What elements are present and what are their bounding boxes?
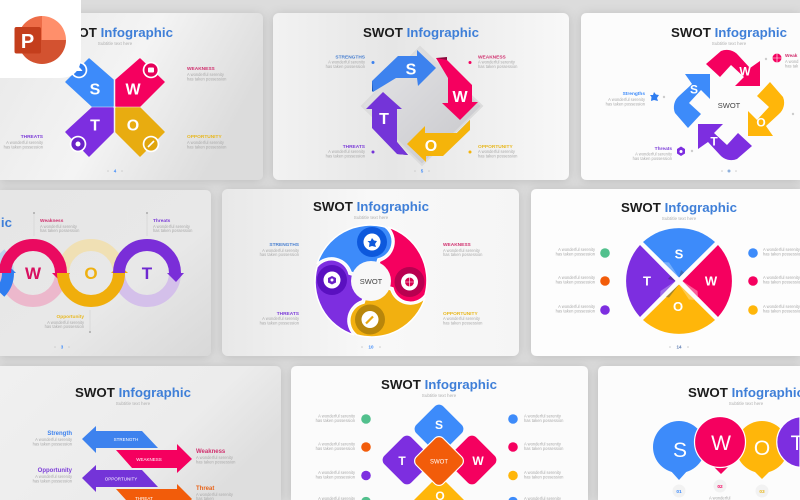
- diamond S: S: [435, 418, 443, 432]
- page number: [54, 344, 70, 350]
- label: threat: [196, 486, 234, 500]
- petal S: S: [90, 82, 101, 98]
- label: strengths: Strengths: [623, 91, 645, 97]
- page number: [414, 168, 430, 174]
- right legend: A wonderful serenity: [763, 304, 800, 309]
- page number: 4: [114, 168, 117, 174]
- label: threat: A wonderful serenity: [196, 492, 234, 497]
- left legend: has taken possession: [316, 418, 356, 423]
- label: strength: [33, 431, 73, 446]
- petal O: O: [127, 118, 139, 134]
- label: weakness: A wonderful serenity: [196, 455, 234, 460]
- right legend: [508, 414, 564, 500]
- ring O: O: [84, 264, 98, 283]
- bubble O: O: [754, 437, 770, 460]
- label: threats: THREATS: [277, 311, 300, 317]
- icon: gear: [317, 265, 347, 295]
- diamond T: [380, 433, 434, 487]
- petal W: [116, 59, 164, 106]
- label: strengths: [326, 54, 374, 69]
- label: opportunity: has taken possession: [478, 154, 518, 158]
- page number: [721, 170, 737, 172]
- step 03: 03: [759, 489, 765, 495]
- label: threats: [633, 146, 693, 161]
- pie slice W: [682, 245, 732, 317]
- arrow W: [436, 57, 478, 120]
- label: weakness: has tak: [785, 64, 799, 68]
- label: threats: A wonderful serenity: [635, 152, 673, 156]
- left legend: has taken possession: [556, 308, 596, 314]
- diamond O: [414, 477, 464, 500]
- subtitle: Subtitle text here: [98, 41, 133, 46]
- panel: arrow diamond SWOT slide: [273, 13, 569, 180]
- right legend: A wonderful serenity: [524, 470, 562, 475]
- arrow T: [366, 92, 408, 155]
- page number: [361, 344, 381, 350]
- label: threats: A wonderful serenity: [6, 140, 44, 145]
- left legend: A wonderful serenity: [318, 470, 356, 475]
- label: opportunity: OPPORTUNITY: [187, 134, 222, 140]
- petal W: W: [125, 82, 141, 98]
- panel: diamond SWOT slide: [291, 366, 588, 500]
- label: weakness: [187, 66, 227, 82]
- left legend: A wonderful serenity: [318, 414, 356, 418]
- arrow letters: W: [739, 64, 751, 78]
- petal T: [66, 108, 113, 156]
- icon: star: [357, 227, 387, 257]
- label: opportunity: A wonderful serenity: [187, 140, 225, 145]
- arrow O: O: [425, 138, 437, 155]
- label: strengths: [260, 242, 300, 257]
- pie letters: [643, 246, 718, 314]
- label: opportunity: A wonderful serenity: [35, 474, 73, 479]
- diamond S: [412, 402, 466, 456]
- label: opportunity: OPPORTUNITY: [443, 311, 478, 317]
- label: opportunity: has taken possession: [187, 144, 227, 150]
- arrow T: T: [379, 111, 389, 128]
- step 01: 01: [676, 489, 682, 495]
- bubble O: [736, 421, 788, 479]
- label: opportunity: [45, 310, 91, 333]
- subtitle: Subtitle text here: [116, 401, 151, 406]
- page number: [107, 168, 123, 174]
- pie letters: T: [643, 274, 651, 288]
- page number: 14: [676, 344, 682, 350]
- ring W: W: [25, 264, 42, 283]
- label: opportunity: has taken possession: [443, 320, 483, 326]
- arrow W: W: [452, 89, 468, 106]
- right legend: A wonderful serenity: [763, 247, 800, 252]
- centre circle: SWOT: [360, 277, 383, 286]
- panel: linked rings SWOT slide: [0, 190, 211, 356]
- label: strength: A wonderful serenity: [35, 437, 73, 442]
- arrow O: [407, 120, 470, 162]
- title: SWOT Infographic: [313, 199, 429, 214]
- label: weakness: WEAKNESS: [187, 66, 216, 72]
- label: threats: has taken possession: [633, 156, 673, 161]
- left legend: has taken possession: [556, 252, 596, 256]
- ring W: [5, 245, 70, 283]
- subtitle: Subtitle text here: [712, 41, 747, 46]
- diamond backdrop: [362, 47, 482, 165]
- ring S: [0, 265, 16, 293]
- arrow S: S: [406, 62, 417, 78]
- label: weakness: WEAKNESS: [478, 54, 507, 60]
- swirl segment O: [350, 281, 425, 337]
- label: weakness: has taken possession: [40, 228, 80, 233]
- label: threats: has taken possession: [153, 228, 193, 233]
- bubble S: [653, 421, 705, 480]
- pale rings: [0, 245, 175, 301]
- panel: swirl circle SWOT slide: [222, 189, 519, 356]
- arrow letters: S: [690, 82, 698, 96]
- panel: pin bubbles SWOT slide: [598, 366, 800, 500]
- diamond centre: SWOT: [430, 460, 448, 466]
- left legend: A wonderful serenity: [558, 247, 596, 252]
- left legend: has taken possession: [316, 474, 356, 480]
- label: threats: [260, 311, 300, 326]
- label: threats: THREATS: [343, 144, 366, 150]
- swirl segment W: [371, 227, 427, 302]
- arrow: threat: [116, 484, 192, 500]
- label: weakness: A wonderful serenity: [478, 60, 516, 64]
- petal T: T: [90, 118, 100, 134]
- label: threats: A wonderful serenity: [328, 149, 366, 154]
- step 01: [672, 484, 686, 498]
- title: SWOT Infographic: [621, 200, 737, 215]
- label: weakness: has taken possession: [478, 64, 518, 69]
- label: opportunity: Opportunity: [57, 314, 84, 320]
- step 02: [714, 480, 726, 492]
- label: weakness: [765, 53, 799, 68]
- label: weakness: has taken possession: [443, 252, 483, 257]
- icon: globe: [394, 267, 424, 297]
- step 02: 02: [717, 484, 723, 490]
- subtitle: Subtitle text here: [729, 401, 764, 406]
- label: threat: Threat: [196, 486, 214, 492]
- arrow O: [748, 82, 784, 136]
- diamond T: T: [398, 454, 406, 468]
- label: opportunity: A wonderful serenity: [47, 320, 85, 325]
- label: opportunity: [468, 144, 518, 158]
- centre label: SWOT: [718, 101, 741, 110]
- label: threats: [146, 212, 193, 236]
- panel: circular arrows SWOT slide: [581, 13, 800, 180]
- bubble W: W: [711, 432, 731, 455]
- centre circle: [351, 261, 391, 301]
- label: opportunity: [443, 311, 483, 326]
- page number: [669, 344, 689, 350]
- label: strengths: has taken possession: [326, 64, 366, 69]
- pie letters: S: [675, 246, 684, 262]
- petal S: [66, 59, 113, 106]
- pie letters: O: [673, 299, 683, 314]
- diamond centre: [412, 434, 466, 488]
- arrow: strength: STRENGTH: [114, 437, 138, 442]
- panel: opposing arrows SWOT slide: [0, 366, 281, 500]
- pie slice O: [643, 284, 715, 334]
- label: opportunity: OPPORTUNITY: [478, 144, 513, 150]
- label: opportunity: A wonderful serenity: [478, 149, 516, 154]
- step 03: [756, 484, 768, 498]
- label: strengths: A wonderful serenity: [328, 60, 366, 64]
- icon: pencil: [355, 304, 385, 334]
- arrow: strength: [82, 426, 158, 453]
- label: threats: Threats: [655, 146, 672, 152]
- left legend: A wonderful serenity: [318, 442, 356, 446]
- label: weakness: A wonderful serenity: [443, 248, 481, 253]
- label: weakness: Weakness: [40, 218, 64, 224]
- arrow W: [706, 50, 760, 86]
- petal O: [116, 108, 164, 156]
- diamond W: W: [472, 454, 484, 468]
- label: strengths: A wonderful serenity: [608, 97, 646, 102]
- icon: PowerPoint logo: P: [21, 31, 34, 53]
- label: weakness: [196, 449, 236, 464]
- right legend: has taken possession: [524, 474, 564, 480]
- subtitle: Subtitle text here: [354, 215, 389, 220]
- label: strengths: [606, 91, 665, 106]
- arrow T: [698, 124, 752, 160]
- page number: 5: [421, 168, 424, 174]
- label: opportunity: Opportunity: [38, 468, 73, 474]
- label: weakness: has taken possession: [196, 460, 236, 464]
- left legend: A wonderful serenity: [558, 304, 596, 309]
- arrow S: [372, 50, 436, 92]
- label: weakness: A wonderful serenity: [40, 224, 78, 229]
- subtitle: Subtitle text here: [662, 216, 697, 221]
- page number: 10: [368, 344, 374, 350]
- arrow: weakness: WEAKNESS: [136, 457, 162, 462]
- label: threats: has taken possession: [326, 154, 366, 158]
- left legend: has taken possession: [556, 280, 596, 284]
- pie letters: W: [705, 274, 718, 288]
- diamond W: [445, 433, 499, 487]
- label: strengths: STRENGTHS: [335, 54, 366, 60]
- label: opportunity: A wonderful serenity: [443, 316, 481, 321]
- subtitle: Subtitle text here: [422, 393, 457, 398]
- arrow: weakness: [116, 444, 192, 473]
- left legend: [316, 414, 371, 500]
- label: threats: has taken possession: [4, 144, 44, 150]
- label: opportunity: [187, 134, 227, 150]
- label: opportunity: has taken possession: [45, 324, 85, 329]
- label: strengths: has taken possession: [606, 102, 646, 106]
- left legend: has taken possession: [316, 446, 356, 451]
- pie slice T: [626, 245, 676, 317]
- arrow letters: T: [710, 134, 718, 148]
- label: strength: Strength: [47, 431, 72, 437]
- label: weakness: WEAKNESS: [443, 242, 472, 248]
- title: SWOT Infographic: [57, 25, 173, 40]
- left legend: A wonderful serenity: [558, 275, 596, 280]
- ring O: [63, 264, 128, 301]
- label: threats: [326, 144, 374, 158]
- label: weakness: Weakness: [196, 449, 226, 455]
- page number: 3: [61, 344, 64, 350]
- right legend: A wonderful serenity: [524, 442, 562, 446]
- left legend: [556, 247, 610, 315]
- arrow letters: [690, 64, 766, 148]
- label: weakness: A wond: [785, 59, 799, 64]
- right legend: A wonderful serenity: [763, 275, 800, 280]
- ring T: T: [142, 264, 153, 283]
- label: strengths: has taken possession: [260, 252, 300, 257]
- label: threats: [4, 134, 44, 150]
- title: SWOT Infographic: [75, 385, 191, 400]
- ring T: [119, 245, 184, 283]
- arrow: opportunity: OPPORTUNITY: [105, 476, 137, 482]
- bubble W: [694, 416, 746, 474]
- label: opportunity: [33, 468, 73, 484]
- label: threats: Threats: [153, 218, 171, 224]
- title: SWOT Infographic: [381, 377, 497, 392]
- label: strengths: STRENGTHS: [269, 242, 300, 248]
- label: threats: has taken possession: [260, 320, 300, 326]
- label: weakness: A wonderful serenity: [187, 72, 225, 77]
- label: weakness: has taken possession: [187, 76, 227, 82]
- swirl segment T: [315, 260, 371, 335]
- right legend: [748, 247, 800, 315]
- panel: four petal SWOT slide: [0, 13, 263, 180]
- arrow letters: O: [756, 116, 766, 130]
- right legend: A wonderful serenity: [524, 414, 562, 418]
- swirl segment S: [317, 225, 392, 281]
- label: threats: A wonderful serenity: [153, 224, 191, 229]
- connector dot: [792, 113, 794, 115]
- label: weakness: [443, 242, 483, 257]
- title: SWOT Infographic: [671, 25, 787, 40]
- bubble T: [777, 417, 800, 467]
- right legend: has taken possession: [524, 446, 564, 451]
- label: strengths: A wonderful serenity: [262, 248, 300, 253]
- bubble S: S: [673, 439, 687, 462]
- label: opportunity: has taken possession: [33, 478, 73, 484]
- label: weakness: [33, 212, 80, 236]
- arrow S: [674, 74, 710, 128]
- title fragment: ic: [1, 215, 12, 230]
- PowerPoint badge: [0, 0, 81, 78]
- title: SWOT Infographic: [363, 25, 479, 40]
- label: weakness: [468, 54, 518, 69]
- pie slice S: [643, 228, 715, 278]
- label: threats: A wonderful serenity: [262, 316, 300, 321]
- label: weakness: Weak: [785, 53, 798, 59]
- right legend: has taken possession: [524, 418, 564, 423]
- label: strength: has taken possession: [33, 442, 73, 446]
- label: threats: THREATS: [21, 134, 44, 140]
- arrow: opportunity: [82, 465, 158, 492]
- panel: pie SWOT slide: [531, 189, 800, 356]
